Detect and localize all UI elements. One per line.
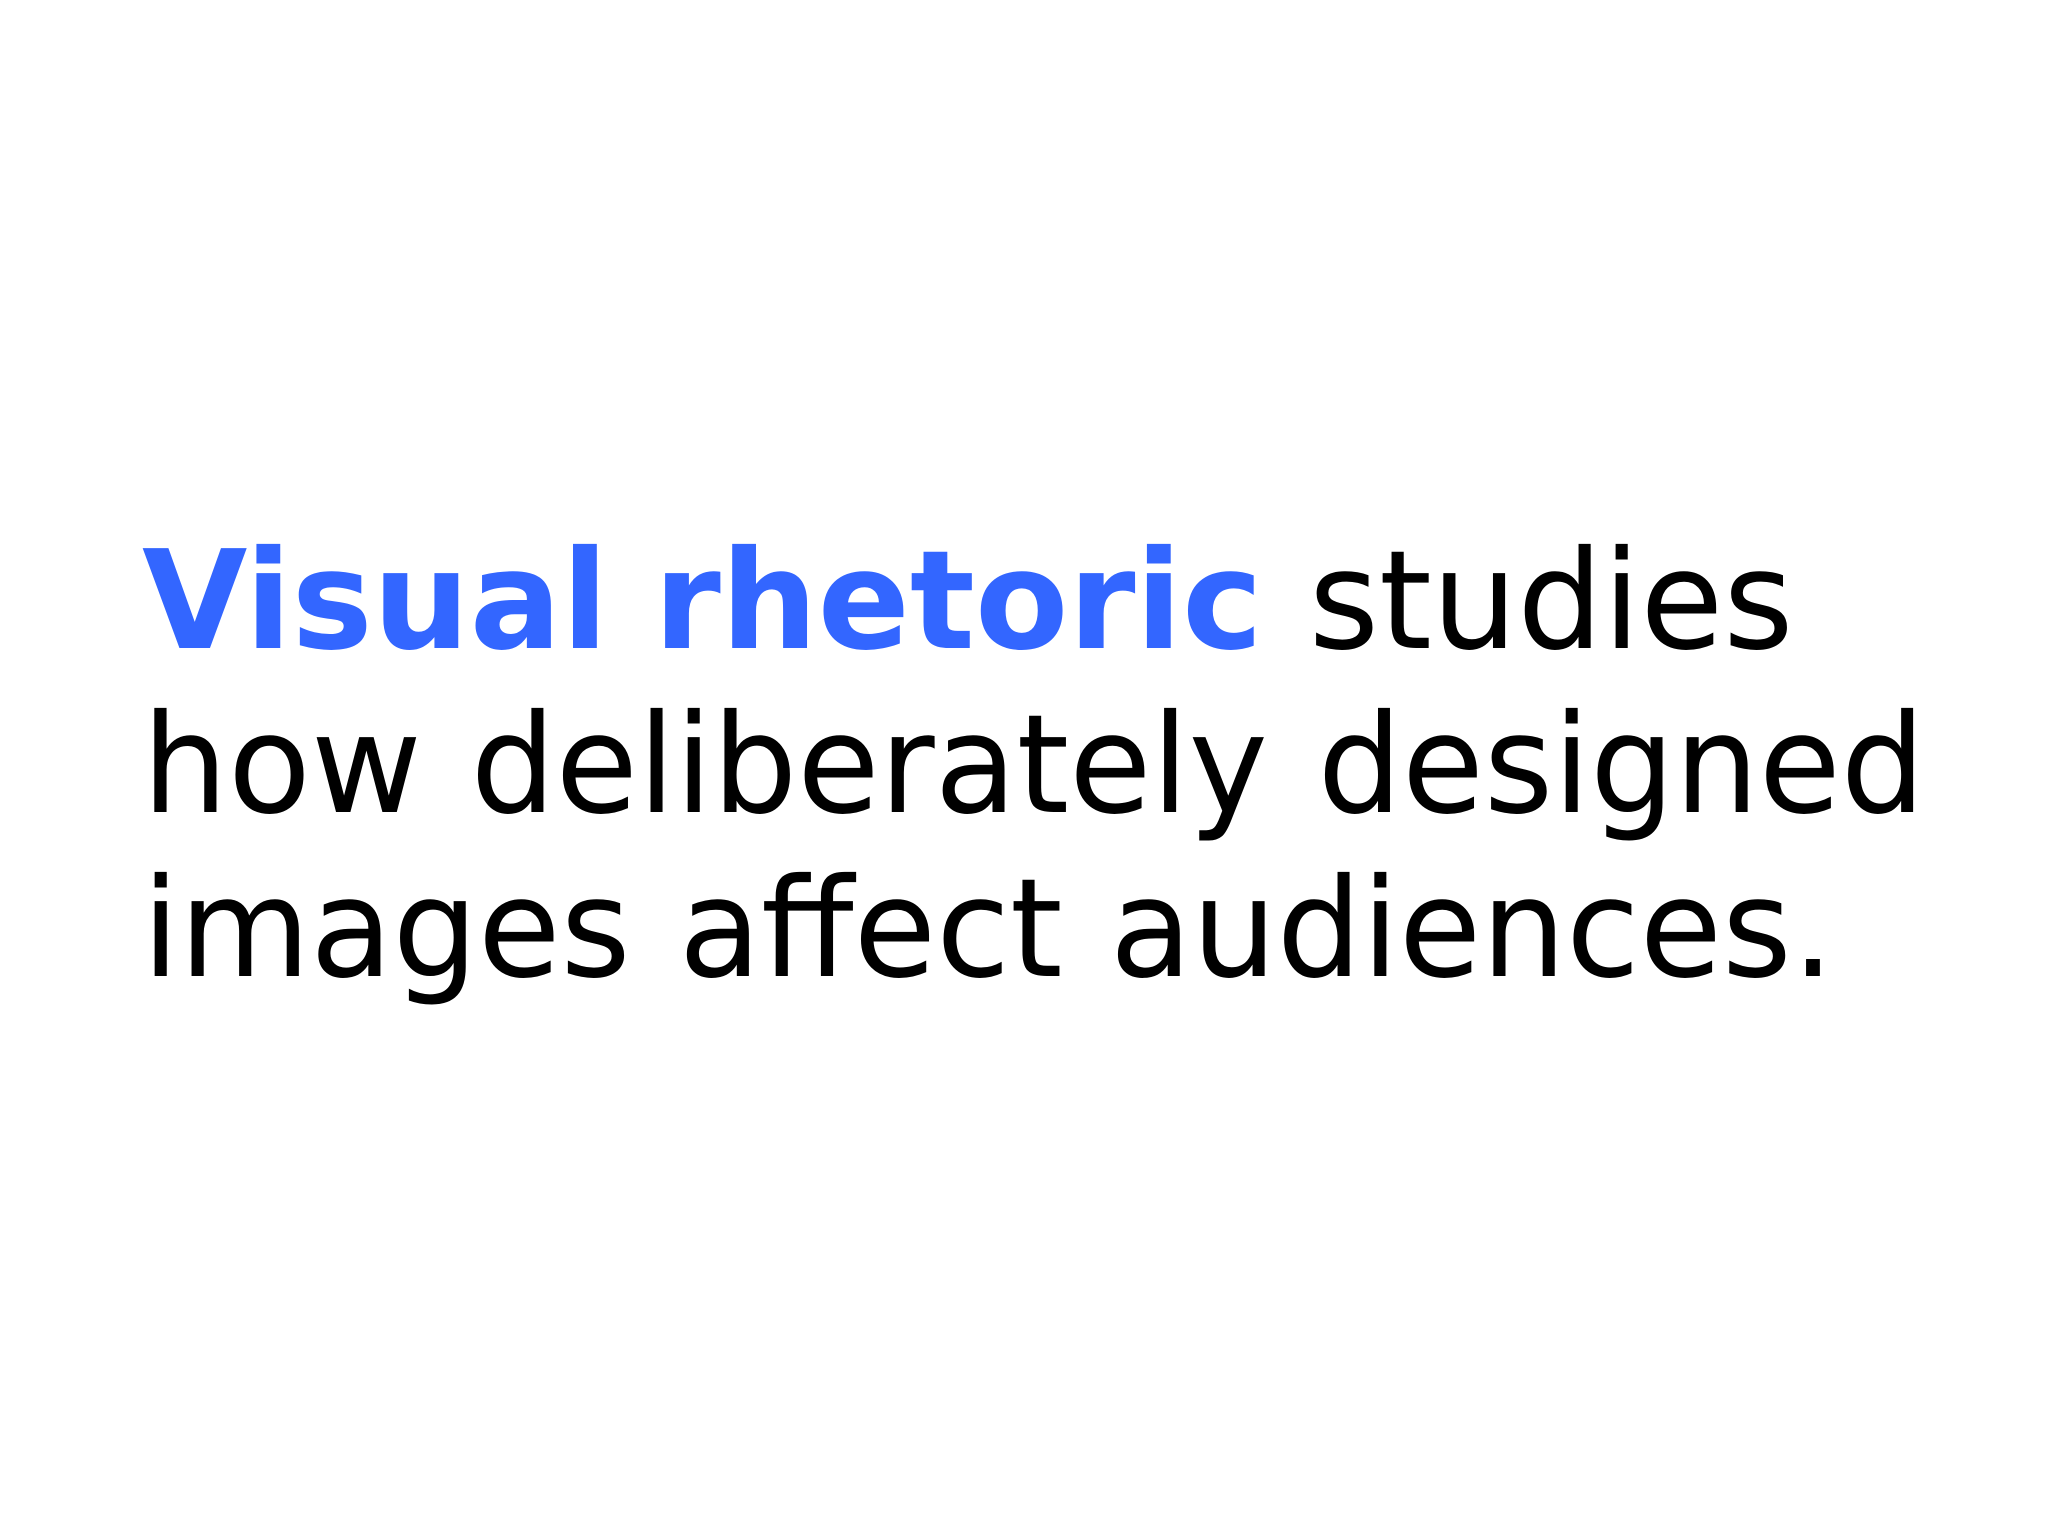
line 3: audiences.	[1110, 850, 1834, 1009]
line 1: highlighted term and verb: Visual	[142, 522, 608, 681]
line 3	[142, 850, 1834, 1009]
line 2: designed	[1317, 686, 1925, 845]
line 2: deliberately	[471, 686, 1268, 845]
line 2	[142, 686, 1925, 845]
line 3: affect	[678, 850, 1062, 1009]
line 1: highlighted term and verb	[142, 522, 1793, 681]
line 2: how	[142, 686, 422, 845]
line 1: highlighted term and verb: rhetoric	[653, 522, 1262, 681]
text block: definition of visual rhetoric	[142, 522, 1925, 1009]
line 1: highlighted term and verb: studies	[1308, 522, 1793, 681]
line 3: images	[142, 850, 631, 1009]
